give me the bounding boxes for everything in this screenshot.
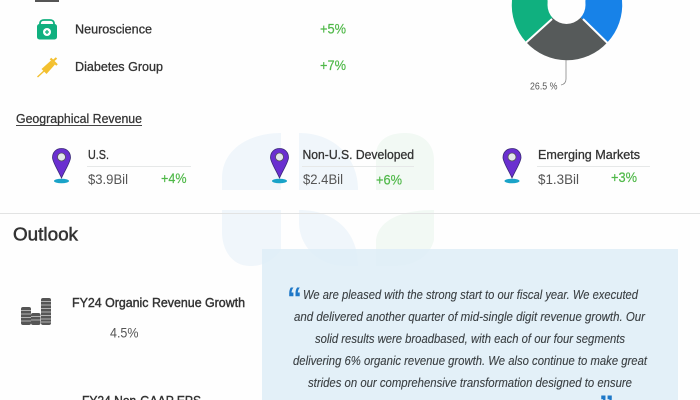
icon: medical bag [37, 20, 57, 40]
panel: CEO quote [262, 249, 678, 400]
icon: location pin [52, 148, 70, 183]
value: Neuroscience growth: +5% [320, 20, 346, 36]
panel: segment revenue list [35, 0, 346, 77]
value: Emerging Markets growth: +3% [611, 169, 637, 185]
icon: syringe [38, 58, 57, 77]
panel: U.S. revenue [52, 147, 191, 187]
value: Non-U.S. growth: +6% [376, 172, 402, 188]
quote text [293, 288, 647, 390]
value: Emerging Markets revenue: $1.3Bil [538, 171, 579, 187]
value: Diabetes growth: +7% [320, 57, 346, 73]
quote text: We are pleased with the strong start to our fiscal year. We executed [303, 288, 639, 302]
donut label: 26.5 % [530, 80, 558, 92]
icon: coin stacks [21, 298, 51, 325]
label: Neuroscience: Neuroscience [75, 22, 152, 36]
quote text: strides on our comprehensive transformation designed to ensure [308, 376, 632, 390]
icon: opening quote mark: “ [287, 282, 302, 315]
value: organic growth: 4.5% [110, 326, 138, 340]
panel: outlook metrics [21, 296, 245, 400]
section divider [0, 213, 700, 214]
label: U.S.: U.S. [88, 147, 109, 162]
label: FY24 Organic Revenue Growth: FY24 Organic Revenue Growth [72, 296, 245, 310]
value: Non-U.S. revenue: $2.4Bil [303, 171, 343, 187]
value: U.S. growth: +4% [161, 170, 186, 186]
icon: location pin [503, 148, 521, 183]
quote text: and delivered another quarter of mid-single digit revenue growth. Our [294, 310, 646, 324]
background watermark logo [222, 133, 434, 266]
icon: cropped top segment [35, 0, 59, 2]
value: U.S. revenue: $3.9Bil [88, 171, 128, 187]
icon: location pin [270, 148, 288, 183]
label: Emerging Markets: Emerging Markets [538, 147, 640, 162]
donut chart [512, 0, 622, 92]
heading: Geographical Revenue: Geographical Revenue [16, 112, 142, 126]
panel: Emerging Markets revenue [503, 147, 650, 187]
label: Diabetes Group: Diabetes Group [75, 59, 163, 74]
label: Non-U.S. Developed: Non-U.S. Developed [302, 147, 414, 162]
quote text: delivering 6% organic revenue growth. We also continue to make great [293, 354, 647, 368]
panel: Non-U.S. Developed revenue [270, 147, 414, 188]
heading: Outlook: Outlook [13, 224, 79, 244]
quote text: solid results were broadbased, with each of our four segments [315, 332, 625, 346]
